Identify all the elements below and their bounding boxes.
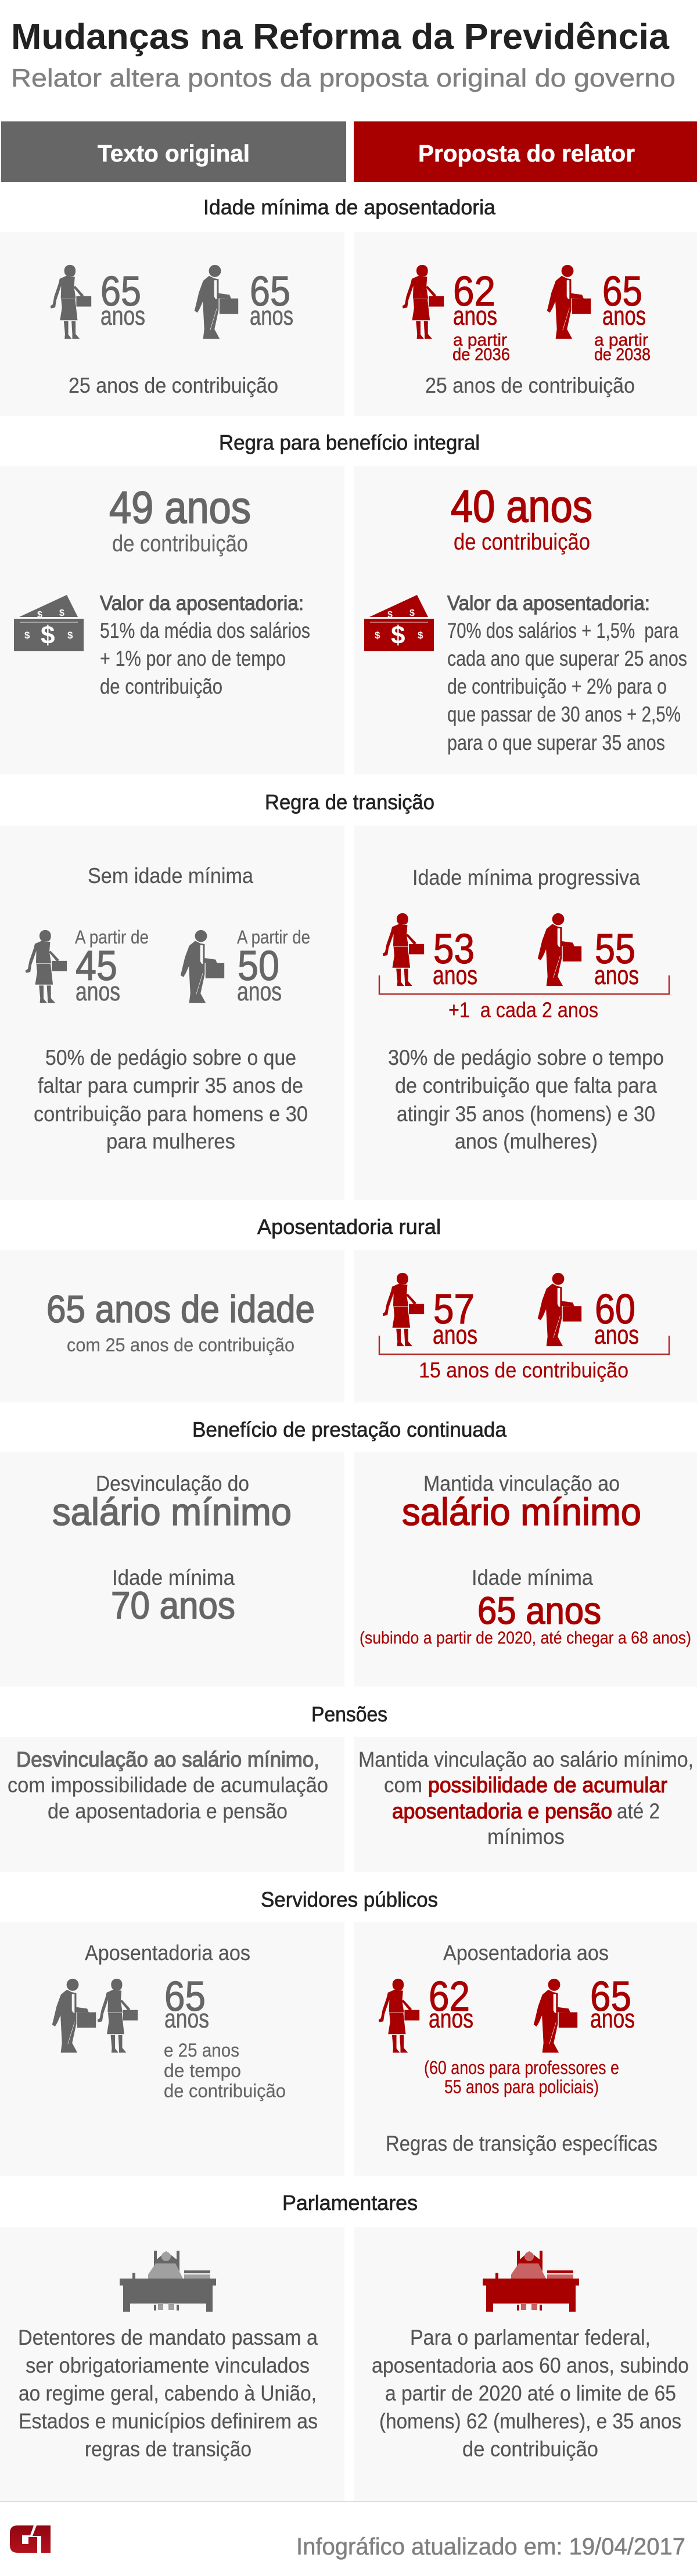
bracket label: 15 anos de contribuição	[419, 1358, 628, 1382]
big age: 65 anos de idade	[46, 1287, 315, 1330]
label: Idade mínima progressiva	[412, 866, 640, 889]
icon: desk	[120, 2251, 216, 2312]
big number: de contribuição	[112, 531, 248, 557]
age women: anos	[433, 960, 477, 990]
icon: money: $	[59, 608, 64, 618]
heading: idade minima: Idade mínima de aposentadoria	[203, 195, 496, 219]
panel: rural relator	[354, 1250, 697, 1402]
transition rules: Regras de transição específicas	[386, 2132, 658, 2155]
age men: anos	[250, 301, 293, 331]
paragraph: a partir de 2020 até o limite de 65	[385, 2381, 676, 2405]
column header: proposta do relator: Proposta do relator	[418, 140, 635, 167]
heading: parlamentares: Parlamentares	[282, 2191, 418, 2215]
text	[358, 1748, 694, 1849]
paragraph: Estados e municípios definirem as	[19, 2409, 318, 2433]
age women: 53	[433, 926, 475, 973]
panel: transicao original	[0, 826, 344, 1200]
panel: servidores relator	[354, 1922, 697, 2176]
icon: man	[52, 1979, 96, 2053]
age men: de 2038	[594, 345, 651, 364]
panel: pensoes original	[0, 1737, 344, 1872]
icon: money: $	[387, 610, 393, 620]
valor text: + 1% por ano de tempo	[100, 647, 286, 670]
age men: a partir	[594, 331, 648, 350]
panel: servidores original	[0, 1922, 344, 2176]
icon: man	[181, 930, 224, 1003]
contribution: 25 anos de contribuição	[69, 374, 278, 397]
age women: anos	[433, 1320, 477, 1350]
age men: 65	[590, 1974, 631, 2020]
age men: anos	[590, 2004, 635, 2033]
panel: transicao relator	[354, 826, 697, 1200]
icon: man	[195, 265, 238, 339]
icon: woman	[379, 1979, 419, 2053]
subtitle: Relator altera pontos da proposta original do governo	[11, 64, 676, 92]
vinculo: Mantida vinculação ao	[423, 1472, 620, 1495]
icon: woman	[98, 1979, 138, 2053]
icon: man	[538, 913, 581, 986]
exceptions	[424, 2057, 619, 2097]
heading: pensoes: Pensões	[311, 1702, 387, 1726]
paragraph	[372, 2326, 689, 2461]
text: possibilidade de acumular	[428, 1773, 667, 1797]
age men: anos	[602, 301, 646, 331]
paragraph: atingir 35 anos (homens) e 30	[397, 1102, 655, 1126]
icon: woman	[383, 913, 424, 986]
icon: desk	[483, 2251, 579, 2312]
icon: money: $	[37, 610, 42, 620]
age women: anos	[100, 301, 145, 331]
big number: de contribuição	[454, 529, 590, 555]
paragraph	[34, 1046, 308, 1153]
exceptions: 55 anos para policiais)	[444, 2076, 599, 2097]
paragraph: ser obrigatoriamente vinculados	[26, 2353, 310, 2377]
text: com	[384, 1773, 422, 1797]
icon: woman	[51, 265, 91, 339]
panel: beneficio integral relator	[354, 466, 697, 774]
age women: 65	[100, 268, 141, 315]
paragraph: de contribuição	[462, 2437, 598, 2461]
age men	[237, 927, 310, 1006]
title: Mudanças na Reforma da Previdência	[11, 17, 670, 57]
vinculo: Desvinculação do	[96, 1472, 249, 1495]
age women: anos	[453, 301, 497, 331]
vinculo	[402, 1472, 641, 1533]
age women	[433, 1286, 477, 1350]
age women: anos	[76, 977, 120, 1006]
age men: 55	[595, 926, 635, 973]
age men	[594, 1286, 639, 1350]
text: mínimos	[487, 1825, 565, 1849]
paragraph: ao regime geral, cabendo à União,	[19, 2381, 317, 2405]
big number	[109, 482, 251, 557]
panel: bpc relator	[354, 1452, 697, 1687]
icon: money: $	[41, 621, 55, 650]
idade: 65 anos	[477, 1589, 601, 1632]
idade: Idade mínima	[112, 1566, 235, 1590]
valor text: Valor da aposentadoria:	[100, 592, 304, 615]
panel: idade minima original	[0, 232, 344, 416]
paragraph: contribuição para homens e 30	[34, 1102, 308, 1126]
bracket	[379, 1336, 669, 1354]
contribution: com 25 anos de contribuição	[67, 1334, 294, 1355]
idade: 70 anos	[111, 1584, 235, 1627]
paragraph: regras de transição	[85, 2437, 252, 2461]
idade: Idade mínima	[472, 1566, 593, 1590]
icon: money: $	[418, 630, 423, 641]
age women: de 2036	[452, 345, 510, 364]
big number	[451, 480, 592, 555]
age women: 62	[429, 1974, 470, 2020]
icon: woman	[26, 930, 67, 1003]
age men	[594, 926, 639, 990]
age men: anos	[594, 1320, 639, 1350]
paragraph: 30% de pedágio sobre o tempo	[388, 1046, 664, 1070]
icon: woman	[383, 1273, 424, 1346]
label: Sem idade mínima	[88, 864, 253, 888]
icon: woman	[403, 265, 444, 339]
icon: money: $	[391, 621, 405, 650]
vinculo: salário mínimo	[52, 1490, 292, 1533]
paragraph	[18, 2326, 318, 2461]
age women: 45	[76, 943, 117, 989]
age men	[594, 268, 651, 364]
label: Aposentadoria aos	[443, 1941, 609, 1965]
icon: money	[364, 595, 434, 651]
icon: money: $	[375, 630, 380, 641]
age women	[433, 926, 477, 990]
bracket	[379, 975, 669, 994]
icon: man	[534, 1979, 577, 2053]
valor text	[100, 592, 310, 698]
paragraph: Para o parlamentar federal,	[410, 2326, 651, 2349]
exceptions: (60 anos para professores e	[424, 2057, 619, 2078]
vinculo: salário mínimo	[402, 1490, 641, 1533]
valor text: de contribuição	[100, 675, 222, 698]
contribution: 25 anos de contribuição	[425, 374, 635, 397]
valor text: 51% da média dos salários	[100, 619, 310, 643]
age women	[452, 268, 510, 364]
contribution	[164, 2040, 286, 2101]
heading: regra de transicao: Regra de transição	[265, 790, 434, 814]
age men: A partir de	[237, 927, 310, 948]
column header: texto original	[1, 121, 346, 182]
age men: 65	[250, 268, 290, 315]
bracket label: +1 a cada 2 anos	[448, 998, 598, 1022]
heading: servidores: Servidores públicos	[261, 1888, 438, 1911]
age women: a partir	[453, 331, 507, 350]
paragraph: faltar para cumprir 35 anos de	[38, 1074, 303, 1097]
panel: parlamentares original	[0, 2227, 344, 2501]
big number: 49 anos	[109, 482, 251, 533]
valor text	[447, 592, 687, 755]
heading: aposentadoria rural: Aposentadoria rural	[257, 1215, 441, 1239]
text: até 2	[617, 1799, 660, 1823]
logo: G1	[10, 2525, 51, 2553]
age women: 57	[433, 1286, 475, 1333]
icon: money: $	[409, 608, 415, 618]
icon: man	[547, 265, 591, 339]
contribution: de contribuição	[164, 2080, 286, 2101]
footer note: Infográfico atualizado em: 19/04/2017	[296, 2533, 685, 2560]
age women	[75, 927, 149, 1006]
heading: bpc: Benefício de prestação continuada	[192, 1418, 507, 1441]
paragraph	[388, 1046, 664, 1153]
text	[8, 1748, 328, 1823]
valor text: Valor da aposentadoria:	[447, 592, 650, 615]
age men: 50	[238, 943, 279, 989]
paragraph: para mulheres	[106, 1129, 235, 1153]
age men: 65	[602, 268, 642, 315]
icon: money	[14, 595, 84, 651]
column header: texto original: Texto original	[98, 140, 250, 167]
text: aposentadoria e pensão	[392, 1799, 612, 1823]
contribution: de tempo	[164, 2060, 241, 2081]
age women: A partir de	[75, 927, 149, 948]
age: 65	[164, 1974, 206, 2020]
panel: beneficio integral original	[0, 466, 344, 774]
paragraph: 50% de pedágio sobre o que	[45, 1046, 296, 1070]
contribution: e 25 anos	[164, 2040, 239, 2061]
text: com impossibilidade de acumulação	[8, 1773, 328, 1797]
panel: pensoes relator	[354, 1737, 697, 1872]
panel: bpc original	[0, 1452, 344, 1687]
column header: proposta do relator	[354, 121, 697, 182]
age women: 62	[453, 268, 495, 315]
icon: money: $	[67, 630, 73, 641]
icon: man	[538, 1273, 581, 1346]
idade	[360, 1566, 691, 1648]
panel: rural original	[0, 1250, 344, 1402]
paragraph: anos (mulheres)	[455, 1129, 598, 1153]
panel: parlamentares relator	[354, 2227, 697, 2501]
paragraph: de contribuição que falta para	[395, 1074, 657, 1097]
icon: money: $	[24, 630, 30, 641]
age men: anos	[594, 960, 639, 990]
text: de aposentadoria e pensão	[48, 1799, 288, 1823]
age women: anos	[429, 2004, 473, 2033]
idade	[111, 1566, 235, 1627]
age men: 60	[595, 1286, 635, 1333]
paragraph: Detentores de mandato passam a	[18, 2326, 318, 2349]
age: anos	[164, 2004, 209, 2033]
label: Aposentadoria aos	[85, 1941, 250, 1965]
age men: anos	[237, 977, 282, 1006]
vinculo	[52, 1472, 292, 1533]
panel: idade minima relator	[354, 232, 697, 416]
heading: beneficio integral: Regra para benefício integral	[219, 430, 480, 454]
big number: 40 anos	[451, 480, 592, 532]
text: Desvinculação ao salário mínimo,	[16, 1748, 319, 1771]
